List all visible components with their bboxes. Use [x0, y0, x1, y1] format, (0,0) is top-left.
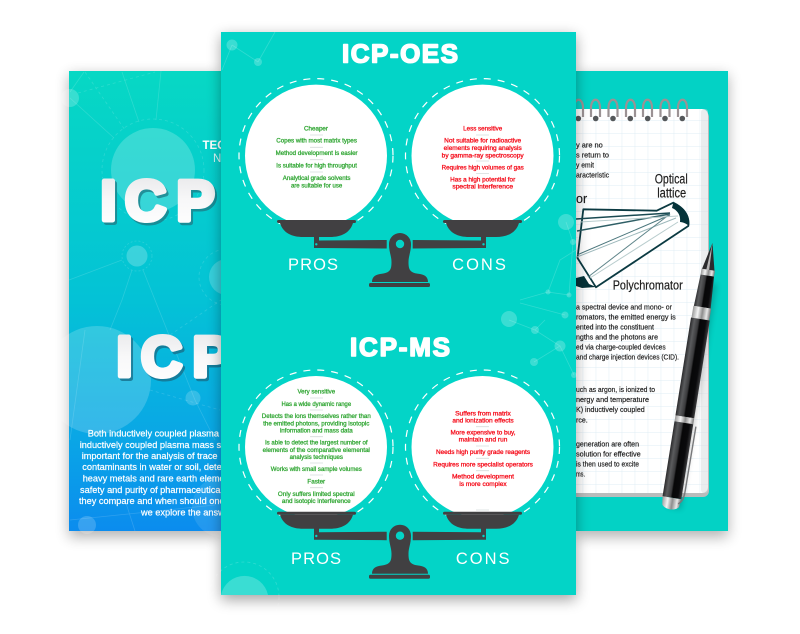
label: MS pros: PROS [291, 550, 341, 568]
list: OES cons: elements requiring analysis [444, 145, 522, 152]
diagram: polychromator sketch [576, 203, 689, 288]
list: MS pros: Detects the ions themselves rather than [262, 413, 371, 420]
label: optical lattice [655, 172, 688, 200]
list: MS pros: the emitted photons, providing isotopic [263, 420, 369, 427]
text: notebook middle paragraph: romators, the emitted energy is [576, 312, 676, 321]
list: MS cons: is more complex [459, 481, 508, 488]
list: OES pros: Analytical grade solvents [283, 175, 350, 182]
list: MS cons: Method development [452, 474, 514, 481]
text block: cover introduction: we explore the answers [140, 507, 238, 517]
text: publisher name: TECHNOLOGY [202, 140, 284, 152]
panel: left cover poster [43, 71, 284, 537]
text: publisher name [202, 140, 284, 165]
list: OES cons: spectral interference [452, 184, 514, 191]
list: MS pros: analysis techniques [290, 454, 343, 461]
icon: pen [661, 242, 725, 511]
text: notebook top paragraph: y emit [576, 160, 595, 169]
panel: centre comparison poster [209, 32, 577, 632]
list: MS pros: elements of the comparative elemental [263, 447, 370, 454]
text: notebook generation paragraph: generation are often [576, 440, 639, 449]
icon: OES balance scale [277, 220, 522, 287]
list: OES pros: Method development is easier [276, 150, 358, 157]
text block: cover introduction: inductively coupled plasma mass spectrometry [80, 440, 270, 450]
label: optical lattice: lattice [657, 186, 686, 200]
label: MS cons: CONS [456, 550, 510, 568]
list: OES pros: Cheaper [304, 125, 328, 132]
list: MS pros [262, 389, 371, 505]
heading: ICP second title: ICP [116, 325, 231, 389]
list: MS pros: information and mass data [280, 428, 353, 435]
text: notebook middle paragraph: a spectral device and mono- or [576, 302, 672, 311]
list: OES pros: Is suitable for high throughput [276, 163, 357, 170]
text: notebook middle paragraph: ented into the constituent [576, 322, 655, 331]
list: MS pros: Faster [307, 478, 325, 485]
list: OES cons: Less sensitive [463, 125, 503, 132]
text: notebook middle paragraph: and charge injection devices (CID). [576, 352, 679, 361]
label: OES pros: PROS [288, 256, 338, 274]
list: MS pros: and isotopic interference [282, 498, 351, 505]
heading: ICP first title: ICP [100, 169, 215, 233]
list: MS cons: maintain and run [459, 437, 508, 444]
list: OES cons: Not suitable for radioactive [444, 138, 522, 145]
list: MS cons: Needs high purity grade reagents [436, 449, 530, 456]
text block: cover introduction: they compare and when should one [79, 496, 225, 506]
notebook spiral rings [574, 100, 687, 121]
list: MS pros: Is able to detect the largest number of [265, 440, 368, 447]
list: MS cons: More expensive to buy, [450, 430, 516, 437]
panel: OES pros circle [239, 79, 393, 233]
label: polychromator: Polychromator [613, 278, 683, 292]
icon: MS balance scale [277, 512, 522, 579]
text block: cover introduction: Both inductively coupled plasma [88, 428, 220, 438]
text block: cover introduction: important for the analysis of trace [82, 451, 218, 461]
text: notebook top paragraph: aracteristic [576, 170, 609, 179]
text: notebook generation paragraph: is then used to excite [576, 460, 639, 469]
label: optical lattice: Optical [655, 172, 688, 186]
panel: MS pros circle [239, 370, 393, 524]
panel: right notebook poster [560, 71, 728, 537]
panel: OES cons circle [406, 79, 560, 233]
heading: ICP-OES: ICP-OES [342, 38, 458, 68]
text block: cover introduction: heavy metals and rare earth elements [83, 474, 237, 484]
list: MS pros: Works with small sample volumes [271, 466, 362, 473]
text block: cover introduction [79, 428, 270, 517]
text: notebook generation paragraph [576, 440, 641, 479]
list: OES cons [442, 125, 525, 191]
text: publisher name: NETWORKS [213, 153, 280, 165]
notebook page [560, 109, 709, 497]
list: OES pros [276, 125, 358, 189]
list: MS cons: Requires more specialist operators [433, 461, 533, 468]
text: notebook generation paragraph: ms. [576, 470, 585, 479]
list: MS cons [433, 410, 533, 488]
list: OES cons: Requires high volumes of gas [442, 164, 524, 171]
list: OES cons: by gamma-ray spectroscopy [442, 152, 525, 159]
text: notebook middle paragraph: ngths and the photons are [576, 332, 658, 341]
text: notebook argon paragraph: uch as argon, is ionized to [576, 385, 655, 394]
label: monochromator fragment: or [576, 192, 587, 206]
list: OES cons: Has a high potential for [450, 177, 515, 184]
text block: cover introduction: safety and purity of pharmaceuticals [80, 485, 227, 495]
label: OES cons: CONS [452, 256, 506, 274]
list: MS cons: Suffers from matrix [455, 410, 512, 417]
text: notebook middle paragraph [576, 302, 679, 361]
text block: cover introduction: contaminants in water or soil, detecting [82, 462, 241, 472]
text: notebook argon paragraph: rce. [576, 416, 588, 424]
list: OES pros: Copes with most matrix types [276, 138, 357, 145]
list: MS cons: and ionization effects [452, 417, 514, 424]
text: notebook top paragraph: s return to [576, 150, 609, 159]
panel: MS cons circle [406, 370, 560, 524]
text: notebook generation paragraph: solution for effective [576, 450, 641, 459]
list: MS pros: Has a wide dynamic range [281, 401, 352, 408]
list: OES pros: are suitable for use [291, 182, 343, 189]
text: notebook middle paragraph: ed via charge-coupled devices [576, 342, 666, 351]
heading: ICP-MS: ICP-MS [350, 332, 450, 362]
text: notebook top paragraph [576, 140, 609, 179]
heading: ICP first title: ICP [102, 172, 217, 236]
list: MS pros: Only suffers limited spectral [278, 491, 355, 498]
text: notebook argon paragraph: nergy and temperature [576, 395, 649, 404]
text: notebook argon paragraph: K) inductively coupled [576, 405, 645, 414]
text: notebook argon paragraph [576, 385, 655, 424]
list: MS pros: Very sensitive [297, 389, 336, 396]
text: notebook top paragraph: y are no [576, 140, 603, 149]
heading: ICP second title: ICP [118, 328, 233, 392]
